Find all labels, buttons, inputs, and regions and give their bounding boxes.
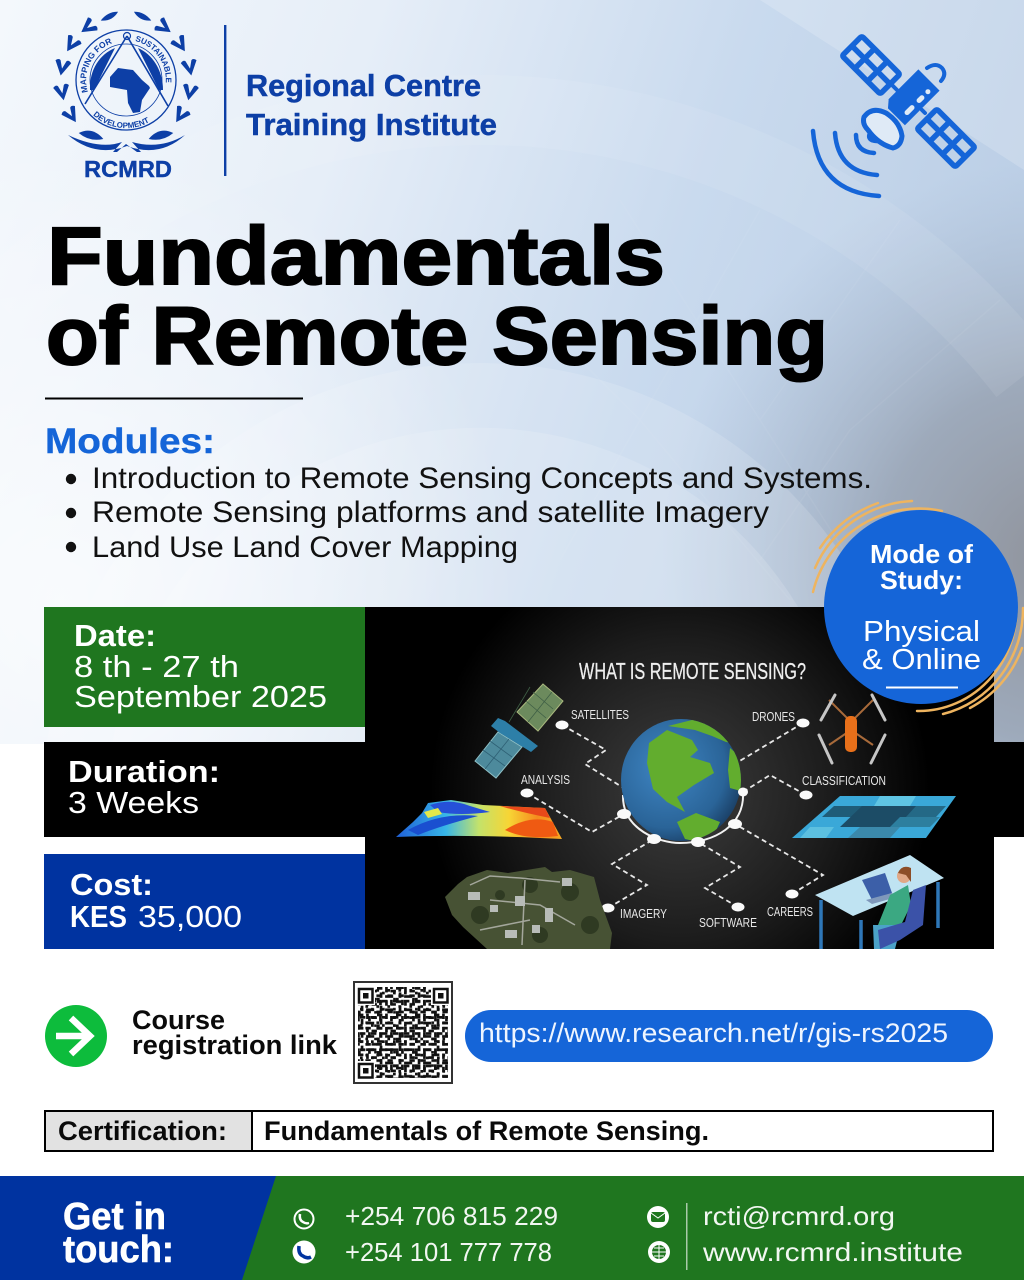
footer heading: Get in bbox=[63, 1196, 166, 1238]
node labels bbox=[521, 707, 886, 930]
connectors and antenna bbox=[892, 65, 944, 113]
person at desk illustration bbox=[815, 855, 944, 949]
laurel wreath bbox=[53, 11, 199, 146]
emblem ring text: SUSTAINABLE bbox=[136, 36, 172, 82]
emblem ring text bbox=[80, 36, 172, 128]
title: Fundamentals bbox=[47, 211, 665, 302]
modules list: Land Use Land Cover Mapping bbox=[92, 531, 518, 564]
certification row bbox=[45, 1111, 993, 1151]
solar panel lower bbox=[917, 109, 975, 167]
title: of Remote Sensing bbox=[46, 291, 828, 382]
panel: date: Date: bbox=[74, 618, 156, 653]
drone illustration bbox=[819, 695, 885, 763]
icon: globe bbox=[648, 1241, 670, 1263]
panel: cost bbox=[44, 854, 365, 949]
icon: satellite bbox=[813, 36, 975, 196]
phone numbers: +254 706 815 229 bbox=[345, 1201, 558, 1231]
panel: duration bbox=[44, 742, 365, 837]
email and website bbox=[702, 1201, 963, 1267]
contact divider bbox=[686, 1203, 688, 1270]
panel: cost: KES bbox=[70, 899, 127, 934]
callout: mode of study: Study: bbox=[880, 565, 963, 595]
panel: duration band right extension bbox=[365, 742, 1024, 837]
modules list: Introduction to Remote Sensing Concepts and Systems. bbox=[92, 462, 872, 495]
classification grid illustration bbox=[792, 796, 956, 838]
QR code bbox=[354, 982, 452, 1083]
dashed connectors bbox=[527, 723, 823, 908]
certification row: Fundamentals of Remote Sensing. bbox=[264, 1116, 709, 1146]
node labels: CAREERS bbox=[767, 904, 813, 919]
icon: phone bbox=[292, 1240, 316, 1264]
map of Africa bbox=[110, 68, 150, 113]
callout: mode of study: & Online bbox=[862, 644, 981, 676]
phone numbers: +254 101 777 778 bbox=[345, 1237, 552, 1267]
aerial imagery illustration bbox=[445, 867, 612, 949]
decorative orange arcs bbox=[813, 501, 1023, 714]
background: geometric blue gradient bbox=[0, 0, 1024, 744]
title underline bbox=[45, 398, 303, 400]
callout value: Physical bbox=[863, 616, 980, 648]
course registration label: Course bbox=[132, 1005, 225, 1035]
course registration label: registration link bbox=[132, 1030, 338, 1060]
registration link pill bbox=[465, 1010, 993, 1062]
title bbox=[46, 211, 828, 382]
footer bbox=[0, 1176, 1024, 1280]
organisation name: Training Institute bbox=[246, 107, 497, 142]
logo: RCMRD emblem bbox=[53, 12, 199, 182]
signal waves bbox=[813, 131, 879, 196]
icon: green arrow bbox=[45, 1005, 107, 1067]
organisation name: Regional Centre bbox=[246, 68, 481, 103]
node labels: DRONES bbox=[752, 709, 795, 724]
certification row: Certification: bbox=[58, 1116, 227, 1146]
satellite illustration bbox=[475, 684, 563, 778]
emblem ring text: DEVELOPMENT bbox=[93, 111, 148, 128]
RCMRD wordmark: RCMRD bbox=[84, 156, 172, 182]
callout: mode of study bbox=[813, 501, 1023, 714]
node labels: IMAGERY bbox=[620, 906, 667, 921]
panel: date bbox=[44, 607, 365, 727]
heatmap illustration bbox=[396, 800, 562, 839]
phone numbers bbox=[345, 1201, 558, 1267]
satellite body bbox=[884, 69, 940, 125]
node labels: CLASSIFICATION bbox=[802, 773, 886, 788]
emblem ring and compass bbox=[76, 30, 176, 130]
node labels: ANALYSIS bbox=[521, 772, 570, 787]
modules list: Remote Sensing platforms and satellite Imagery bbox=[92, 496, 769, 529]
panel: cost: 35,000 bbox=[138, 899, 242, 934]
email and website: www.rcmrd.institute bbox=[702, 1237, 963, 1267]
course registration label bbox=[132, 1005, 338, 1060]
registration link pill: https://www.research.net/r/gis-rs2025 bbox=[479, 1018, 948, 1048]
panel: duration: Duration: bbox=[68, 754, 220, 789]
globe bbox=[621, 717, 744, 842]
panel: date: September 2025 bbox=[74, 679, 327, 714]
emblem ribbon bbox=[68, 135, 185, 152]
modules heading: Modules: bbox=[45, 422, 215, 461]
nodes bbox=[520, 718, 812, 912]
modules list bbox=[66, 462, 872, 564]
panel: cost: Cost: bbox=[70, 867, 153, 902]
footer heading bbox=[63, 1196, 174, 1271]
emblem ring text: MAPPING FOR bbox=[80, 38, 112, 93]
solar panel upper bbox=[842, 36, 900, 94]
icon: email bbox=[647, 1206, 669, 1228]
email and website: rcti@rcmrd.org bbox=[703, 1201, 895, 1231]
callout heading: Mode of bbox=[870, 539, 973, 569]
illustration heading: WHAT IS REMOTE SENSING? bbox=[579, 658, 806, 684]
dish bbox=[864, 110, 902, 148]
panel: duration: 3 Weeks bbox=[68, 785, 199, 820]
node labels: SOFTWARE bbox=[699, 915, 757, 930]
orbit ring bbox=[623, 792, 743, 843]
panel: date: 8 th - 27 th bbox=[74, 649, 239, 684]
panel: what is remote sensing illustration bbox=[365, 607, 994, 949]
footer heading: touch: bbox=[63, 1229, 174, 1271]
node labels: SATELLITES bbox=[571, 707, 629, 722]
organisation name bbox=[246, 68, 497, 142]
logo divider bbox=[224, 25, 226, 176]
icon: whatsapp bbox=[294, 1210, 314, 1228]
